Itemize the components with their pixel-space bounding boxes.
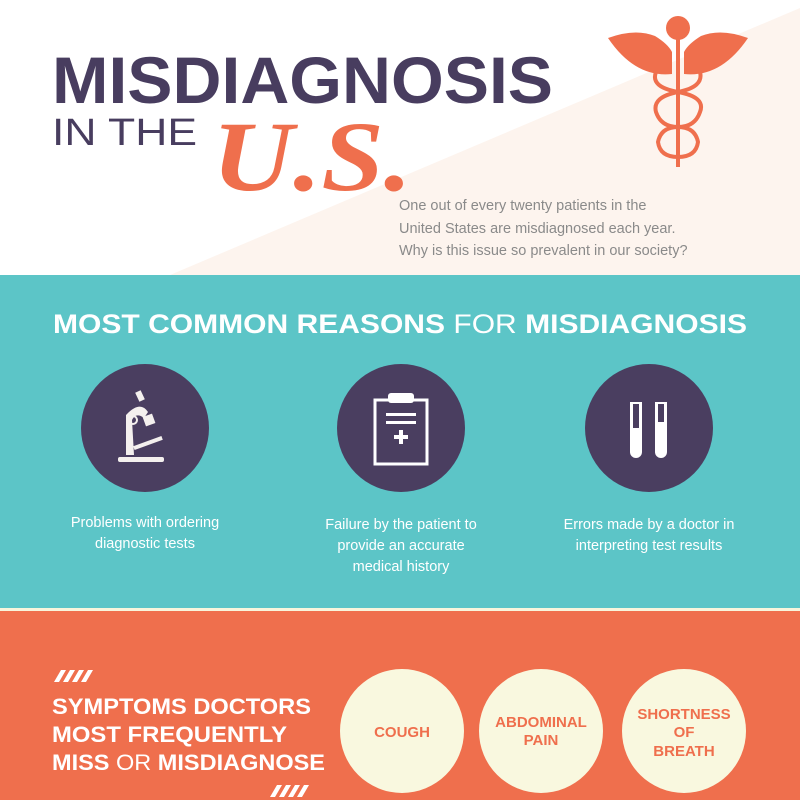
icon: clipboard xyxy=(337,364,465,492)
header background diagonal xyxy=(170,8,800,275)
intro text: Why is this issue so prevalent in our society? xyxy=(399,243,688,259)
title xyxy=(52,43,553,212)
captions: interpreting test results xyxy=(576,538,722,554)
title: MISDIAGNOSIS xyxy=(52,43,553,117)
decorative slashes xyxy=(54,670,309,797)
captions: Problems with ordering xyxy=(71,515,219,531)
heading: symptoms: MOST FREQUENTLY xyxy=(52,722,287,747)
title: IN THE xyxy=(52,112,197,154)
captions: provide an accurate xyxy=(337,538,465,554)
symptom circles: ABDOMINAL xyxy=(495,714,587,731)
intro text: One out of every twenty patients in the xyxy=(399,198,646,214)
captions xyxy=(71,515,734,575)
panel: symptoms xyxy=(0,611,800,800)
symptom circles: SHORTNESS xyxy=(637,706,731,723)
symptom circles: BREATH xyxy=(653,743,715,760)
title: U.S. xyxy=(212,101,412,212)
intro text: United States are misdiagnosed each year. xyxy=(399,221,675,237)
symptom circles: COUGH xyxy=(374,724,430,741)
captions: Errors made by a doctor in xyxy=(564,517,734,533)
icon: test tubes xyxy=(585,364,713,492)
captions: medical history xyxy=(353,559,450,575)
captions: diagnostic tests xyxy=(95,536,195,552)
heading: symptoms: SYMPTOMS DOCTORS xyxy=(52,694,311,719)
captions: Failure by the patient to xyxy=(325,517,477,533)
heading: symptoms: MISS OR MISDIAGNOSE xyxy=(52,750,325,775)
symptom circles: OF xyxy=(674,724,694,741)
panel: reasons xyxy=(0,275,800,608)
heading: symptoms xyxy=(52,694,325,775)
icon: caduceus xyxy=(608,16,748,167)
heading: reasons: MOST COMMON REASONS FOR MISDIAGNOSIS xyxy=(53,309,747,339)
icon: microscope xyxy=(81,364,209,492)
symptom circles: PAIN xyxy=(524,732,558,749)
symptom circles xyxy=(340,669,746,793)
intro text xyxy=(399,198,688,259)
